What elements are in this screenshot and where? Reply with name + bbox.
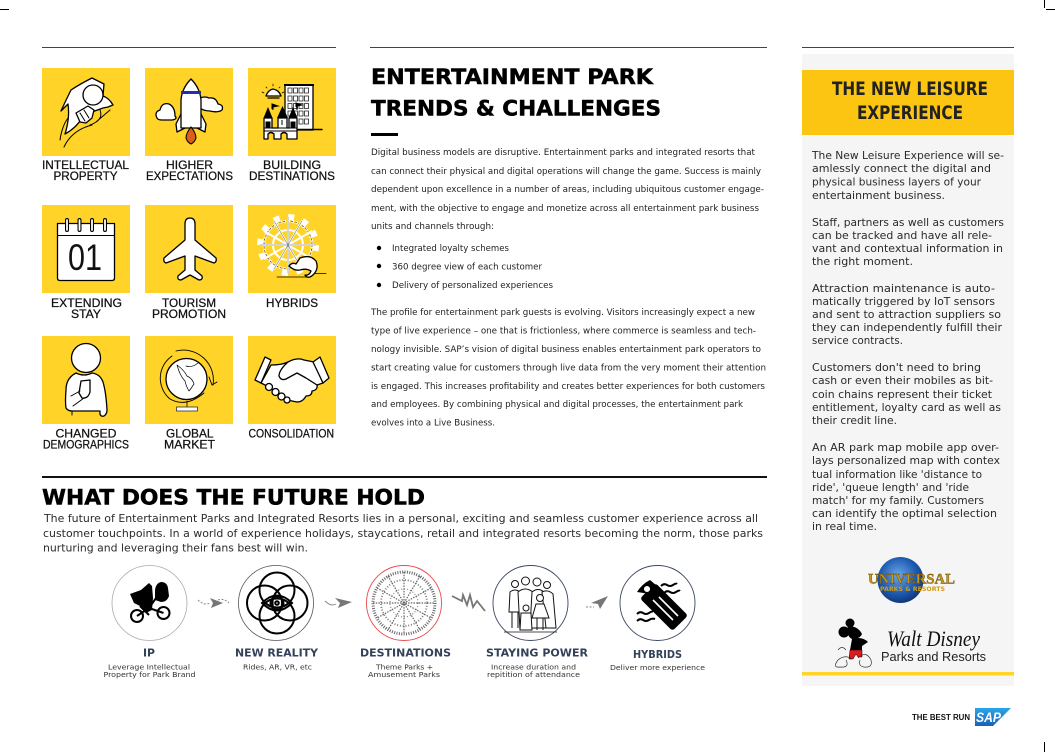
panel text: seamless connection: physical business layers of your	[812, 176, 982, 188]
panel text: payments: coin chains represent their ticket	[812, 389, 992, 401]
panel text: maintenance	[812, 283, 1003, 347]
stage: destinations	[360, 566, 451, 679]
tile: building destinations: BUILDING	[263, 158, 321, 172]
title: TRENDS & CHALLENGES	[371, 96, 661, 120]
text block: guest profile: is engaged. This increases profitability and creates better experiences for both customers	[371, 382, 765, 392]
panel text: AR map: in real time.	[812, 521, 877, 533]
text block: introduction	[371, 148, 764, 232]
logo: Universal Parks and Resorts	[868, 557, 955, 603]
tile: global market: MARKET	[164, 438, 216, 452]
text block: future summary: The future of Entertainment Parks and Integrated Resorts lies in a personal, exciting and seamless customer experience across all	[43, 514, 758, 525]
title	[371, 65, 661, 136]
stage: new reality: Rides, AR, VR, etc	[243, 662, 312, 672]
tile: intellectual property	[42, 68, 130, 183]
panel text: tracking: Staff, partners as well as customers	[812, 217, 1004, 229]
panel header: THE NEW LEISURE	[832, 79, 988, 100]
text block: guest profile: start creating value for customers through live data from the very moment their attention	[371, 364, 766, 374]
logo: Walt Disney Parks and Resorts: Parks and Resorts	[881, 650, 986, 664]
tile: intellectual property: PROPERTY	[54, 169, 118, 183]
tile: global market	[145, 336, 233, 452]
bullet list	[377, 244, 553, 291]
tile: extending stay: EXTENDING	[51, 296, 122, 310]
arrow: destinations to staying power	[452, 595, 485, 611]
text block: guest profile: type of live experience – one that is frictionless, where commerce is seamless and tech-	[371, 326, 756, 336]
text block: guest profile: evolves into a Live Business.	[371, 418, 495, 428]
panel text: tracking: the right moment.	[812, 256, 913, 268]
tile: higher expectations	[145, 68, 233, 183]
tile: building destinations: DESTINATIONS	[249, 169, 335, 183]
text block: guest profile: nology invisible. SAP’s vision of digital business enables entertainment park operators to	[371, 345, 761, 355]
text block: future summary: customer touchpoints. In a world of experience holidays, staycations, retail and integrated resorts becoming the norm, those parks	[43, 529, 763, 540]
panel text: seamless connection: amlessly connect the digital and	[812, 163, 991, 175]
text block: guest profile: and employees. By combining physical and digital processes, the entertainment park	[371, 400, 744, 410]
logo: The Best Run SAP: SAP	[976, 709, 1002, 725]
tile: extending stay: 01	[68, 237, 102, 278]
tile: higher expectations: HIGHER	[166, 158, 213, 172]
panel text: maintenance: they can independently fulfill their	[812, 322, 1003, 334]
panel text: payments: their credit line.	[812, 415, 897, 427]
tile: building destinations	[248, 68, 336, 183]
panel text: AR map: An AR park map mobile app over-	[812, 442, 999, 454]
panel text: AR map: match' for my family. Customers	[812, 495, 984, 507]
tile: changed demographics	[42, 336, 130, 452]
panel text: AR map	[812, 442, 1000, 533]
stage: destinations: Theme Parks +	[375, 662, 433, 672]
tile: global market: GLOBAL	[166, 426, 214, 440]
panel text: maintenance: service contracts.	[812, 335, 903, 347]
stage: destinations: DESTINATIONS	[360, 648, 451, 660]
title: ENTERTAINMENT PARK	[371, 65, 654, 89]
stage: IP: Leverage Intellectual	[108, 662, 190, 672]
heading: what does the future hold: WHAT DOES THE FUTURE HOLD	[42, 486, 425, 510]
tile: consolidation: CONSOLIDATION	[248, 426, 334, 440]
panel header	[802, 70, 1014, 135]
text block: introduction: ment, with the objective to engage and monetize across all entertainment park business	[371, 204, 759, 214]
panel text: payments: Customers don't need to bring	[812, 362, 981, 374]
panel text: payments	[812, 362, 1001, 427]
tile: extending stay	[42, 205, 130, 321]
tile: higher expectations: EXPECTATIONS	[146, 169, 233, 183]
tile: tourism promotion: TOURISM	[162, 296, 216, 310]
panel text: tracking: can be tracked and have all rele-	[812, 230, 992, 242]
tile: intellectual property: INTELLECTUAL	[42, 158, 129, 172]
panel text: tracking: vant and contextual information in	[812, 243, 1003, 255]
stage: IP	[104, 566, 196, 679]
panel: trend icon grid	[42, 68, 336, 452]
arrow: new reality to destinations	[325, 598, 352, 608]
panel: the new leisure experience	[802, 54, 1014, 686]
tile: hybrids: HYBRIDS	[266, 296, 318, 310]
flow: future stages	[104, 566, 705, 679]
panel text: maintenance: and sent to attraction suppliers so	[812, 309, 1001, 321]
tile: hybrids	[248, 205, 336, 310]
text block: introduction: Digital business models are disruptive. Entertainment parks and integrated resorts that	[371, 148, 755, 158]
logo: Mickey Mouse	[835, 618, 871, 667]
text block: introduction: can connect their physical and digital operations will change the game. Success is mainly	[371, 167, 762, 177]
tile: tourism promotion: PROMOTION	[152, 307, 226, 321]
arrow: staying power to hybrids	[586, 596, 608, 609]
logo: The Best Run SAP: THE BEST RUN	[912, 713, 970, 722]
bullet list: Integrated loyalty schemes	[392, 244, 509, 254]
text block: future summary: nurturing and leveraging their fans best will win.	[43, 544, 308, 554]
stage: staying power: repitition of attendance	[487, 670, 580, 679]
logo: Walt Disney Parks and Resorts: Walt Disney	[887, 626, 980, 651]
panel text: tracking	[812, 217, 1004, 268]
panel text: seamless connection	[811, 150, 1004, 202]
text block: introduction: units and channels through:	[371, 222, 494, 232]
logo: Universal Parks and Resorts: PARKS & RESORTS	[880, 585, 945, 593]
panel text: AR map: ride', 'queue length' and 'ride	[812, 482, 969, 494]
stage: destinations: Amusement Parks	[368, 670, 440, 679]
panel text: payments: entitlement, loyalty card as well as	[812, 402, 1001, 414]
logo: Universal Parks and Resorts: UNIVERSAL	[868, 572, 955, 588]
panel text: AR map: tual information like 'distance to	[812, 469, 982, 481]
tile: consolidation	[248, 336, 336, 440]
stage: staying power	[486, 566, 588, 679]
stage: IP: IP	[143, 648, 155, 660]
tile: changed demographics: CHANGED	[56, 426, 117, 440]
stage: hybrids	[610, 566, 705, 672]
text block: future summary	[43, 514, 763, 554]
arrow: IP to new reality	[198, 598, 229, 608]
panel text: payments: cash or even their mobiles as bit-	[812, 375, 993, 387]
panel text: maintenance: matically triggered by IoT sensors	[812, 296, 995, 308]
text block: introduction: dependent upon excellence in a number of areas, including ubiquitous customer engage-	[371, 185, 764, 195]
stage: hybrids: Deliver more experience	[610, 663, 705, 672]
panel text: AR map: can identify the optimal selection	[812, 508, 997, 520]
panel text: maintenance: Attraction maintenance is auto-	[812, 283, 995, 295]
stage: new reality: NEW REALITY	[235, 648, 318, 660]
logo: Walt Disney Parks and Resorts	[881, 626, 986, 664]
text block: guest profile: The profile for entertainment park guests is evolving. Visitors increasingly expect a new	[370, 308, 755, 318]
stage: new reality	[235, 566, 318, 672]
bullet list: Delivery of personalized experiences	[392, 281, 553, 291]
tile: tourism promotion	[145, 205, 233, 321]
logo: The Best Run SAP	[912, 708, 1011, 726]
tile: changed demographics: DEMOGRAPHICS	[43, 438, 129, 452]
panel text: AR map: lays personalized map with contex	[812, 455, 1000, 467]
stage: hybrids: HYBRIDS	[633, 649, 682, 661]
text block: guest profile	[370, 308, 766, 428]
panel text: seamless connection: entertainment business.	[812, 190, 945, 202]
stage: staying power: STAYING POWER	[486, 648, 588, 660]
panel header: EXPERIENCE	[857, 103, 963, 124]
bullet list: 360 degree view of each customer	[392, 262, 542, 272]
panel text: seamless connection: The New Leisure Experience will se-	[811, 150, 1004, 162]
tile: extending stay: STAY	[71, 307, 101, 321]
stage: IP: Property for Park Brand	[104, 670, 196, 679]
stage: staying power: Increase duration and	[491, 662, 576, 672]
